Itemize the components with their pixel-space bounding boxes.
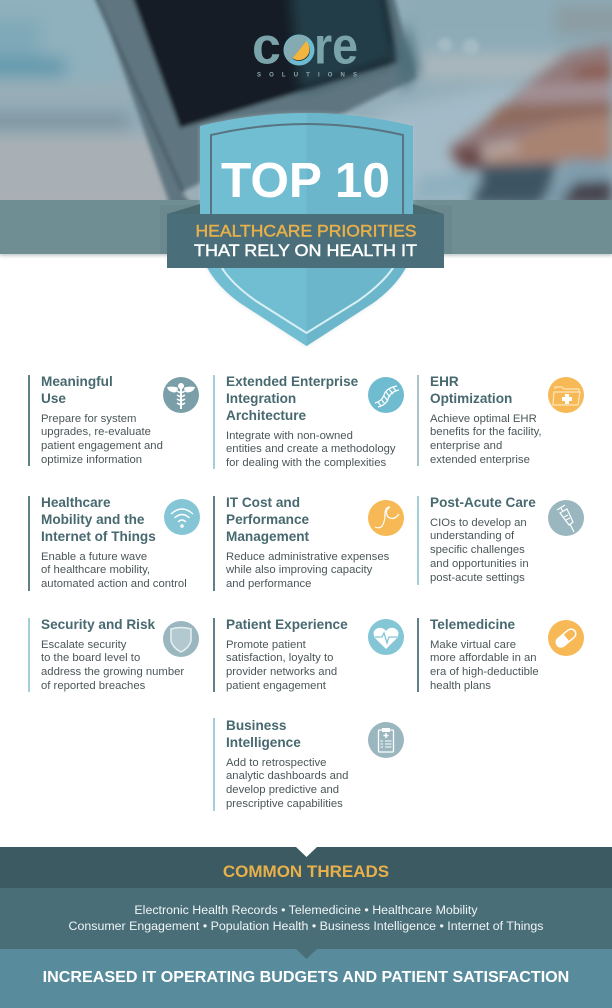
priority: Post-Acute Care: [417, 495, 584, 585]
footer band: common threads heading: [0, 847, 612, 888]
icon: stethoscope: [368, 500, 404, 536]
priority: Business Intelligence: develop predictive and: [226, 784, 339, 796]
footer band: common threads heading: COMMON THREADS: [223, 862, 389, 881]
priority: Meaningful Use: Prepare for system: [41, 412, 136, 424]
icon: syringe: [548, 500, 584, 536]
priority: Extended Enterprise Integration Architecture: Integration: [226, 390, 296, 406]
priority: Meaningful Use: Meaningful: [41, 374, 113, 388]
icon: shield: [163, 621, 199, 657]
footer band: common threads list: Electronic Health Records • Telemedicine • Healthcare Mobility: [134, 903, 478, 917]
priority: IT Cost and Performance Management: while also improving capacity: [226, 564, 372, 576]
subtitle line 1: HEALTHCARE PRIORITIES: [196, 222, 416, 240]
footer band: outcome: [0, 949, 612, 1008]
title text: TOP 10: [221, 154, 390, 208]
footer band: common threads list: [0, 888, 612, 949]
priority: EHR Optimization: EHR: [430, 374, 459, 388]
priority: Business Intelligence: Business: [226, 718, 286, 733]
priority: Extended Enterprise Integration Architecture: Integrate with non-owned: [226, 430, 353, 442]
priority: Security and Risk: [28, 617, 199, 692]
icon: wifi: [164, 499, 200, 535]
priority: Telemedicine: [417, 617, 584, 692]
icon: heart with pulse: [368, 619, 404, 655]
priority: Telemedicine: era of high-deductible: [430, 666, 539, 678]
priority: Meaningful Use: Use: [41, 390, 66, 406]
priority: Security and Risk: Escalate security: [41, 638, 126, 650]
subtitle line 2: THAT RELY ON HEALTH IT: [194, 241, 417, 260]
priority: EHR Optimization: extended enterprise: [430, 454, 530, 466]
priority: Post-Acute Care: understanding of: [430, 530, 514, 542]
footer notch: [296, 847, 317, 857]
priority: Patient Experience: Patient Experience: [226, 617, 348, 632]
priority: Telemedicine: health plans: [430, 680, 491, 692]
priority: Post-Acute Care: and opportunities in: [430, 558, 529, 570]
priority: IT Cost and Performance Management: IT Cost and: [226, 495, 300, 510]
priority: Healthcare Mobility and the Internet of Things: Internet of Things: [41, 529, 156, 544]
priority: Healthcare Mobility and the Internet of Things: of healthcare mobility,: [41, 564, 150, 576]
priority: Extended Enterprise Integration Architecture: entities and create a methodology: [226, 443, 396, 455]
title badge: shield and ribbon: [167, 111, 444, 346]
priority: Telemedicine: Make virtual care: [430, 638, 516, 650]
priority: Patient Experience: satisfaction, loyalty to: [226, 652, 333, 664]
icon: medical folder: [548, 377, 584, 413]
priority: Patient Experience: provider networks and: [226, 666, 337, 678]
priority: Meaningful Use: patient engagement and: [41, 440, 163, 452]
priority: Meaningful Use: optimize information: [41, 454, 142, 466]
priority: Security and Risk: to the board level to: [41, 652, 140, 664]
priority: IT Cost and Performance Management: Performance: [226, 512, 309, 527]
grey-teal band: [0, 200, 612, 254]
priority: IT Cost and Performance Management: [213, 495, 404, 591]
priority: IT Cost and Performance Management: Management: [226, 529, 309, 544]
priority: EHR Optimization: Optimization: [430, 390, 512, 406]
hero photo: blurred laptop and hands: [0, 0, 612, 200]
priority: Business Intelligence: Add to retrospective: [226, 756, 326, 768]
priority: EHR Optimization: benefits for the facility,: [430, 426, 542, 438]
icon: DNA helix: [368, 377, 404, 413]
priority: Security and Risk: Security and Risk: [41, 617, 155, 632]
priority: IT Cost and Performance Management: Reduce administrative expenses: [226, 550, 389, 562]
priority: Extended Enterprise Integration Architecture: Extended Enterprise: [226, 374, 358, 388]
priority: Patient Experience: Promote patient: [226, 638, 306, 650]
priority: Extended Enterprise Integration Architecture: [213, 374, 404, 469]
priority: Post-Acute Care: post-acute settings: [430, 572, 525, 584]
arrow between list and outcome: [296, 949, 317, 959]
icon: caduceus: [163, 377, 199, 413]
priority: Post-Acute Care: Post-Acute Care: [430, 495, 536, 510]
priority: Patient Experience: [213, 617, 404, 692]
footer band: outcome: INCREASED IT OPERATING BUDGETS AND PATIENT SATISFACTION: [43, 968, 569, 986]
icon: clipboard: [368, 722, 404, 758]
priority: Patient Experience: patient engagement: [226, 680, 326, 692]
priority: Business Intelligence: analytic dashboards and: [226, 770, 348, 782]
priority: Security and Risk: of reported breaches: [41, 680, 145, 692]
priority: Telemedicine: more affordable in an: [430, 652, 537, 664]
priority: Healthcare Mobility and the Internet of Things: Mobility and the: [41, 512, 144, 527]
priority: EHR Optimization: enterprise and: [430, 440, 502, 452]
priority: EHR Optimization: Achieve optimal EHR: [430, 412, 537, 424]
icon: pill: [548, 620, 584, 656]
priority: Healthcare Mobility and the Internet of Things: Enable a future wave: [41, 550, 147, 562]
priority: Extended Enterprise Integration Architecture: Architecture: [226, 408, 306, 422]
priority: Extended Enterprise Integration Architecture: for dealing with the complexities: [226, 457, 386, 469]
priority: Healthcare Mobility and the Internet of Things: [28, 495, 200, 591]
logo: Core Solutions: [252, 25, 358, 78]
priority: Healthcare Mobility and the Internet of Things: automated action and control: [41, 578, 187, 590]
priority: Post-Acute Care: specific challenges: [430, 544, 525, 556]
priority: Telemedicine: Telemedicine: [430, 617, 515, 632]
priority: Meaningful Use: upgrades, re-evaluate: [41, 426, 151, 438]
priority: Business Intelligence: prescriptive capabilities: [226, 798, 343, 810]
footer band: common threads list: Consumer Engagement • Population Health • Business Intelligence • Internet of Things: [69, 919, 543, 933]
priority: Business Intelligence: Intelligence: [226, 735, 301, 750]
priority: Security and Risk: address the growing number: [41, 666, 184, 678]
priority: Meaningful Use: [28, 374, 199, 466]
logo: Core Solutions: SOLUTIONS: [257, 72, 357, 78]
priority: Healthcare Mobility and the Internet of Things: Healthcare: [41, 495, 111, 510]
priority: Business Intelligence: [213, 718, 404, 811]
priority: IT Cost and Performance Management: and performance: [226, 578, 311, 590]
priority: Post-Acute Care: CIOs to develop an: [430, 516, 527, 528]
priority: EHR Optimization: [417, 374, 584, 466]
